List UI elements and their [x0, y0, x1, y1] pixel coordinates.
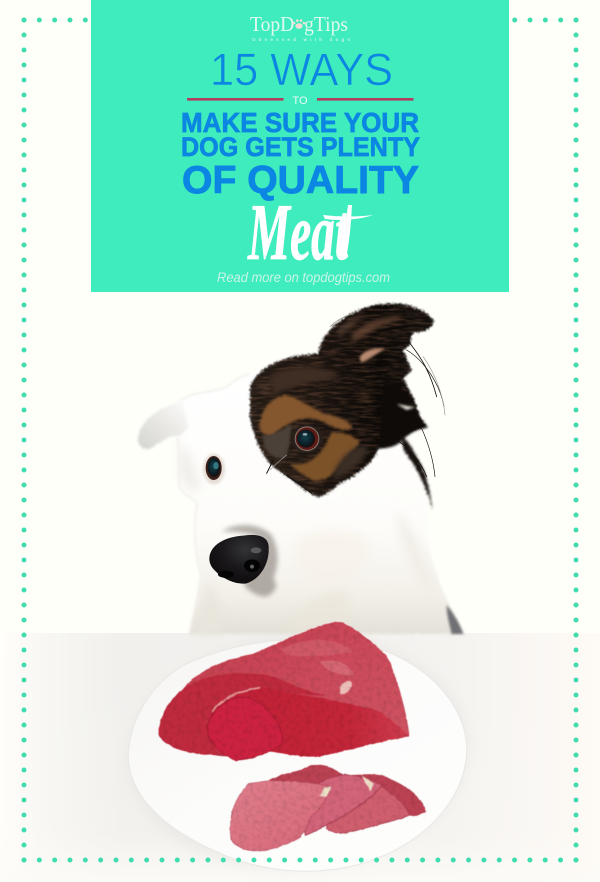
- inner ear pink: [359, 348, 385, 363]
- dog right eye: [290, 425, 324, 453]
- divider right: [317, 98, 414, 101]
- heading line: make sure your: MAKE SURE YOUR: [181, 107, 419, 138]
- ear brown streaks: [270, 313, 407, 395]
- dark face patch and right ear: [250, 303, 434, 497]
- tapered long black wisp: [400, 433, 433, 510]
- markings drawn in closer coordinates: [250, 303, 445, 510]
- brown cheek fur: [290, 432, 360, 481]
- divider left: [187, 98, 284, 101]
- roast left side: [158, 673, 327, 757]
- plate shadow: [120, 624, 476, 880]
- plate: [128, 639, 467, 871]
- dog left eye: [203, 454, 225, 484]
- script word meat: Meat: [247, 189, 350, 277]
- dog soft outline shadow: [178, 375, 250, 634]
- back slice: [268, 765, 427, 816]
- read more link: Read more on topdogtips.com: [217, 270, 390, 285]
- brown brow fur: [259, 395, 353, 437]
- pale fat streak: [340, 680, 352, 694]
- left ear: [138, 401, 188, 449]
- front slice: [230, 781, 332, 852]
- fur shading on head and chest: [180, 442, 437, 634]
- dog photo illustration: [138, 303, 464, 634]
- roast round muscle: [207, 698, 283, 761]
- fine hair strokes: [267, 314, 445, 493]
- logo: TopDogTips: [250, 12, 348, 36]
- paw icon: [293, 19, 305, 29]
- top dots left: [24, 18, 86, 22]
- dog white head and body: [178, 370, 464, 634]
- black fur spikes on right: [378, 382, 428, 448]
- sliced meat: [230, 765, 427, 852]
- top dots right: [515, 18, 577, 22]
- bottom dots: [24, 858, 577, 862]
- table surface: [0, 633, 600, 882]
- middle slice: [305, 774, 382, 836]
- pale fat edge: [319, 787, 332, 797]
- heading line: dog gets plenty: DOG GETS PLENTY: [181, 132, 420, 162]
- heading: 15 ways: 15 WAYS: [210, 44, 393, 95]
- left dots: [22, 20, 26, 861]
- title panel: [91, 0, 509, 292]
- heading line: of quality: OF QUALITY: [182, 159, 419, 202]
- logo: Obsessed with dogs: [252, 37, 350, 42]
- large roast cut: [158, 621, 410, 761]
- darker streaks in cheek: [333, 445, 367, 480]
- dog nose: [209, 525, 278, 597]
- grey-brown fur around eye: [262, 425, 292, 459]
- right dots: [574, 20, 578, 861]
- small word to: TO: [292, 95, 308, 107]
- third slice: [326, 785, 410, 833]
- roast top surface: [158, 621, 410, 760]
- meat on plate: [128, 621, 467, 871]
- light surface highlight: [280, 640, 353, 656]
- pale streak in black fur: [397, 404, 415, 410]
- roast cut face: [208, 687, 410, 760]
- chest grey tuft: [447, 605, 463, 634]
